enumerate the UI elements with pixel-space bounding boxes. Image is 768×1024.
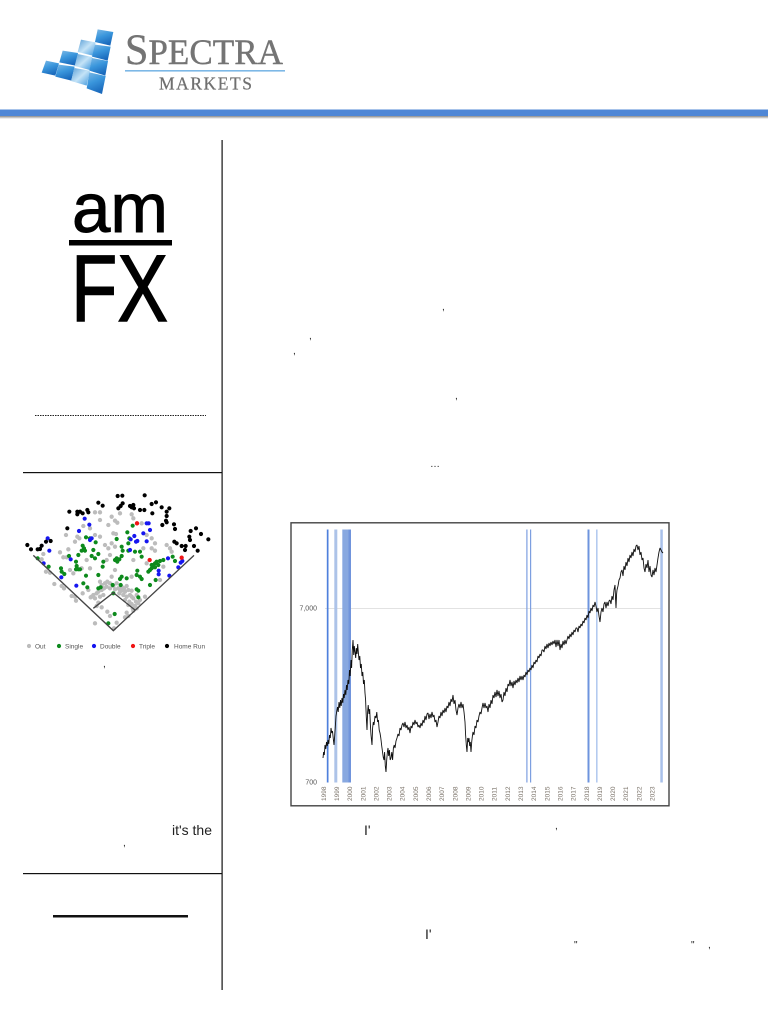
x axis year labels: 2007 <box>439 786 446 801</box>
sidebar text fragment: it's the <box>172 822 212 838</box>
field outline <box>33 555 194 631</box>
am/FX wordmark: FX <box>71 236 168 342</box>
red dots: triples <box>137 523 182 560</box>
x axis year labels: 2006 <box>426 786 433 801</box>
x axis year labels: 2020 <box>610 786 617 801</box>
y axis labels: 700 <box>305 780 317 786</box>
spray chart legend: Out <box>35 644 46 650</box>
x axis year labels: 2010 <box>479 786 486 801</box>
chart frame <box>291 523 669 806</box>
logo wordmark: SPECTRA <box>125 27 283 74</box>
stray punctuation from body text <box>103 302 711 951</box>
x axis year labels: 1998 <box>321 786 328 801</box>
y axis labels: 7,000 <box>299 606 317 612</box>
sidebar divider lines <box>23 140 223 990</box>
x axis year labels: 2015 <box>544 786 551 801</box>
stray punctuation from body text: , <box>442 302 445 313</box>
stray punctuation from body text: , <box>708 940 711 951</box>
spray chart: batted balls on baseball field <box>27 495 208 631</box>
am/FX wordmark: am <box>72 169 168 247</box>
grey dots: outs <box>42 512 172 628</box>
x axis year labels: 2012 <box>505 786 512 801</box>
x axis year labels: 2019 <box>597 786 604 801</box>
gridline at 7,000 <box>325 608 662 610</box>
x axis year labels: 2014 <box>531 786 538 801</box>
logo: Spectra Markets <box>42 27 285 94</box>
y axis labels <box>299 606 317 786</box>
am/FX wordmark <box>69 169 172 342</box>
x axis year labels: 2021 <box>623 786 630 801</box>
x axis year labels: 2016 <box>558 786 564 801</box>
x axis year labels: 2009 <box>465 786 472 801</box>
stray punctuation from body text: … <box>430 459 440 470</box>
x axis year labels: 2004 <box>400 786 407 801</box>
logo subtitle: MARKETS <box>159 74 252 94</box>
x axis year labels: 2011 <box>492 787 499 801</box>
x axis year labels: 2017 <box>571 786 578 801</box>
x axis year labels: 2018 <box>584 786 591 801</box>
stray punctuation from body text: , <box>293 346 296 357</box>
x axis year labels: 1999 <box>334 786 341 801</box>
spray chart legend <box>27 644 205 650</box>
stray punctuation from body text: " <box>574 940 578 951</box>
x axis year labels: 2000 <box>347 786 354 801</box>
spray chart legend: Double <box>100 644 121 650</box>
green dots: singles <box>38 526 175 623</box>
stray punctuation from body text: I' <box>425 926 432 942</box>
x axis year labels: 2023 <box>650 786 656 801</box>
spray chart legend: Single <box>65 644 83 650</box>
x axis year labels: 2005 <box>413 786 420 801</box>
x axis year labels: 2022 <box>636 786 643 801</box>
chart: price index with highlighted periods <box>291 523 669 806</box>
stray punctuation from body text: , <box>103 659 106 670</box>
stray punctuation from body text: , <box>555 821 558 832</box>
spray chart legend: Triple <box>139 644 155 650</box>
price line <box>323 545 663 772</box>
stray punctuation from body text: I' <box>364 822 371 838</box>
x axis year labels: 2013 <box>518 786 525 801</box>
icon: blue tile staircase <box>42 29 113 94</box>
sidebar dotted rule <box>35 414 206 416</box>
x axis year labels <box>321 786 656 801</box>
black dots: home runs <box>27 495 208 551</box>
blue dots: doubles <box>44 519 182 586</box>
stray punctuation from body text: , <box>455 391 458 402</box>
highlighted blue periods <box>327 530 663 782</box>
stray punctuation from body text: , <box>123 838 126 849</box>
stray punctuation from body text: " <box>691 940 695 951</box>
x axis year labels: 2001 <box>360 786 367 801</box>
sidebar thick rule <box>53 915 188 918</box>
header bar <box>0 110 768 119</box>
logo rule <box>125 70 285 72</box>
x axis year labels: 2002 <box>373 786 380 801</box>
stray punctuation from body text: , <box>309 331 312 342</box>
spray chart legend: Home Run <box>174 644 205 650</box>
x axis year labels: 2003 <box>387 786 394 801</box>
x axis year labels: 2008 <box>452 786 459 801</box>
